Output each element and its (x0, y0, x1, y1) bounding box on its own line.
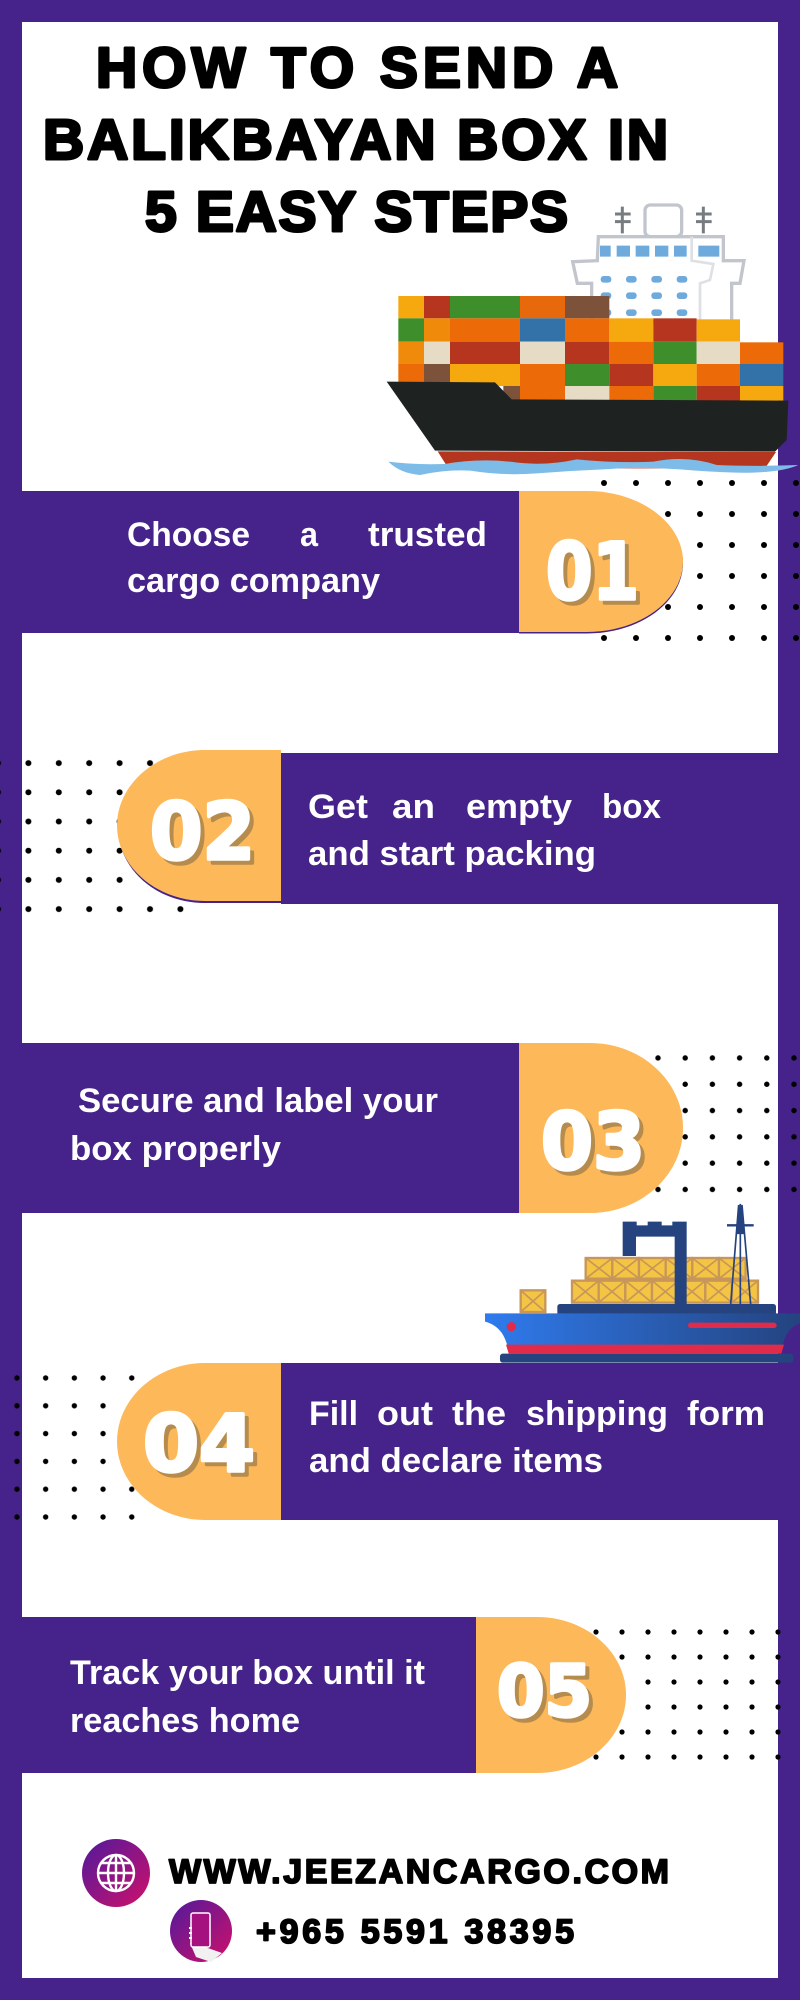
step 5 bar (22, 1617, 476, 1773)
mast (727, 1204, 754, 1304)
illustration: container ship (387, 205, 798, 475)
phone number: +965 5591 38395 (256, 1913, 574, 1951)
step 2 text: Get (308, 788, 368, 826)
step 5 text: reaches home (70, 1702, 300, 1740)
step 4 text: out (377, 1395, 433, 1433)
step 3 badge: 03 (545, 1102, 649, 1192)
step 4 text (309, 1395, 765, 1480)
ship superstructure (573, 205, 744, 322)
title: HOW TO SEND A (96, 36, 618, 100)
step 5 badge: 05 (501, 1654, 596, 1737)
stacked crates (521, 1258, 758, 1312)
step 1 (22, 468, 800, 654)
step 2 badge: 02 (154, 792, 259, 882)
step 4 badge (117, 1363, 281, 1520)
step 5 text (70, 1654, 425, 1740)
step 4 text: form (687, 1395, 765, 1433)
step 2 dot pattern (0, 748, 195, 924)
step 3 dot pattern (644, 1045, 800, 1203)
step 1 text: trusted (368, 516, 487, 554)
title: BALIKBAYAN BOX IN (43, 108, 668, 172)
step 5 (22, 1617, 791, 1773)
step 3 text: box properly (70, 1130, 281, 1168)
ship hull (387, 382, 788, 452)
step 4 bar (281, 1363, 778, 1520)
step 2 bar (281, 753, 778, 904)
step 4 dot pattern (3, 1364, 147, 1531)
step 5 dot pattern (583, 1620, 791, 1770)
step 1 bar (22, 491, 519, 633)
crane (623, 1222, 687, 1305)
icon: globe (82, 1839, 150, 1907)
step 5 badge (476, 1617, 626, 1773)
step 3 text (70, 1082, 438, 1168)
water wave (388, 459, 798, 475)
step 5 text: Track your box until it (70, 1654, 425, 1692)
keel (500, 1354, 793, 1363)
step 3 (22, 1043, 800, 1213)
title (43, 36, 668, 244)
step 2 text: empty (466, 788, 572, 826)
ship red keel (438, 451, 776, 468)
step 1 text (127, 516, 487, 600)
step 2 text (308, 788, 661, 873)
step 3 bar (22, 1043, 519, 1213)
step 5 badge: 05 (497, 1650, 592, 1733)
step 4 (3, 1363, 778, 1531)
step 1 text: a (300, 516, 319, 554)
step 3 text: Secure and label your (78, 1082, 438, 1120)
icon: phone in hand (170, 1900, 232, 1962)
red stripe (506, 1345, 784, 1354)
step 1 badge: 01 (550, 532, 643, 622)
step 1 text: Choose (127, 516, 250, 554)
step 2 text: and start packing (308, 835, 596, 873)
step 2 badge (117, 750, 281, 903)
deck (557, 1304, 776, 1315)
step 1 dot pattern (588, 468, 800, 654)
porthole and hull stripe (507, 1322, 777, 1331)
step 4 badge: 04 (143, 1400, 255, 1490)
step 2 (0, 748, 778, 924)
website address: WWW.JEEZANCARGO.COM (169, 1853, 669, 1891)
step 4 text: shipping (526, 1395, 668, 1433)
step 4 text: the (452, 1395, 506, 1433)
step 2 text: an (392, 788, 435, 826)
illustration: cargo ship with crates (485, 1204, 800, 1363)
title: 5 EASY STEPS (145, 180, 568, 244)
step 4 badge: 04 (147, 1404, 259, 1494)
step 4 text: Fill (309, 1395, 358, 1433)
step 1 text: cargo company (127, 562, 380, 600)
step 3 badge: 03 (541, 1098, 645, 1188)
step 4 text: and declare items (309, 1442, 603, 1480)
step 2 text: box (602, 788, 661, 826)
blue hull (485, 1313, 800, 1345)
step 2 badge: 02 (150, 788, 255, 878)
step 1 badge (519, 491, 683, 634)
step 3 badge (519, 1043, 683, 1213)
step 1 badge: 01 (546, 528, 639, 618)
cargo containers (398, 296, 783, 401)
